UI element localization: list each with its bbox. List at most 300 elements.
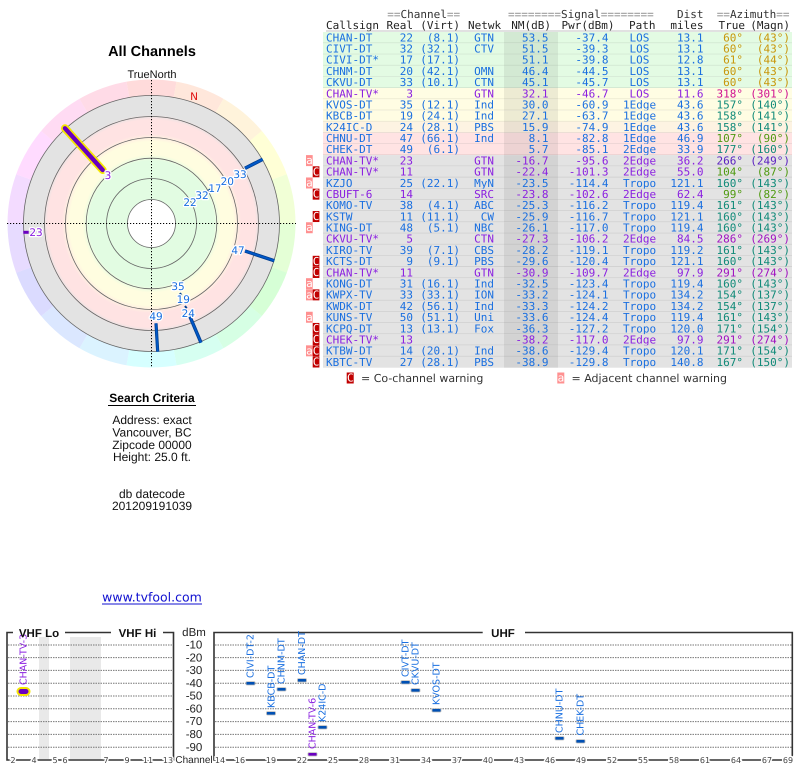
true north label: TrueNorth bbox=[127, 69, 177, 81]
UHF channel axis: 52 bbox=[607, 756, 617, 765]
row: KIRO-TV: CBS bbox=[474, 244, 494, 257]
row: KVOS-DT: 157° bbox=[716, 98, 743, 111]
row: KING-DT: -117.0 bbox=[569, 222, 608, 235]
row: CHEK-TV*: -117.0 bbox=[569, 333, 608, 346]
dBm scale: Channel bbox=[175, 755, 213, 766]
row: CHAN-DT: GTN bbox=[474, 31, 494, 44]
row: KBCB-DT: 19 bbox=[400, 110, 413, 123]
row: CHEK-DT: (6.1) bbox=[427, 143, 460, 156]
row: KING-DT: (5.1) bbox=[427, 222, 460, 235]
row: KWPX-TV: 134.2 bbox=[670, 289, 704, 302]
stations bearing 157 degrees: 19 bbox=[177, 294, 190, 306]
row: KING-DT: (143°) bbox=[750, 222, 790, 235]
station: CHNM-DT: CHNM-DT bbox=[276, 638, 288, 684]
row: K24IC-D: 158° bbox=[716, 121, 743, 134]
row: K24IC-D: -74.9 bbox=[575, 121, 608, 134]
row: KOMO-TV: (4.1) bbox=[427, 199, 460, 212]
row: KTBW-DT: (154°) bbox=[750, 345, 790, 358]
row: CHAN-TV* 11: -101.3 bbox=[569, 166, 608, 179]
row: KOMO-TV: Tropo bbox=[623, 199, 656, 212]
row: CHEK-DT: CHEK-DT bbox=[326, 143, 373, 156]
row: KBCB-DT: -63.7 bbox=[575, 110, 608, 123]
row: KBTC-TV: KBTC-TV bbox=[326, 356, 373, 369]
row: CHAN-DT: 60° bbox=[723, 31, 743, 44]
row: KSTW: C bbox=[313, 210, 319, 223]
dBm scale: -20 bbox=[186, 652, 202, 664]
row: CKVU-TV*: -106.2 bbox=[569, 233, 608, 246]
row: KING-DT: 119.4 bbox=[670, 222, 704, 235]
row: KWPX-TV bbox=[306, 288, 792, 302]
row: KWPX-TV: (137°) bbox=[750, 289, 790, 302]
row: KBCB-DT: (24.1) bbox=[420, 110, 460, 123]
table header: True bbox=[718, 19, 745, 32]
row: KWDK-DT: -33.3 bbox=[515, 300, 548, 313]
dBm scale: -90 bbox=[186, 742, 202, 754]
title: All Channels bbox=[108, 44, 196, 60]
row: KSTW: (11.1) bbox=[420, 210, 460, 223]
UHF channel axis bbox=[215, 756, 793, 765]
row: KING-DT: -26.1 bbox=[515, 222, 548, 235]
row: KWDK-DT: (56.1) bbox=[420, 300, 460, 313]
row: CKVU-TV* bbox=[323, 233, 792, 246]
stations bearing 60 degrees bbox=[183, 159, 263, 209]
row: KVOS-DT: 30.0 bbox=[522, 98, 548, 111]
row: CKVU-DT: 13.1 bbox=[677, 76, 704, 89]
row: KCPQ-DT: (13.1) bbox=[420, 322, 460, 335]
row: KBCB-DT: KBCB-DT bbox=[326, 110, 373, 123]
row: CHAN-DT: 13.1 bbox=[677, 31, 704, 44]
station 3 bearing: 3 bbox=[105, 170, 111, 182]
row: KONG-DT: (16.1) bbox=[420, 277, 460, 290]
row: CKVU-DT: CKVU-DT bbox=[326, 76, 373, 89]
row: KCTS-DT: (143°) bbox=[750, 255, 790, 268]
row: KWDK-DT: KWDK-DT bbox=[326, 300, 373, 313]
row: CIVT-DT: LOS bbox=[630, 42, 649, 55]
row: CHNM-DT: CHNM-DT bbox=[326, 65, 373, 78]
row: CHNU-DT: 47 bbox=[400, 132, 413, 145]
database date code: db datecode bbox=[119, 487, 185, 501]
row: KCPQ-DT: -127.2 bbox=[569, 322, 608, 335]
row: KUNS-TV: (51.1) bbox=[420, 311, 460, 324]
row: CKVU-TV*: 5 bbox=[406, 233, 413, 246]
row: KOMO-TV bbox=[323, 199, 792, 212]
station: KBCB-DT: KBCB-DT bbox=[266, 666, 278, 708]
station 23 bearing bbox=[23, 227, 43, 239]
row: CIVT-DT: 60° bbox=[723, 42, 743, 55]
row: KONG-DT: (143°) bbox=[750, 277, 790, 290]
row: CKVU-DT: 45.1 bbox=[522, 76, 548, 89]
station 47 bearing bbox=[231, 245, 274, 261]
VHF channel axis: 9 bbox=[124, 756, 130, 765]
row: CHAN-TV* 11: GTN bbox=[474, 166, 494, 179]
search details: Address: exact bbox=[112, 413, 192, 427]
row: K24IC-D: PBS bbox=[474, 121, 494, 134]
row: KCTS-DT: KCTS-DT bbox=[326, 255, 373, 268]
row: CBUFT-6 bbox=[313, 188, 792, 201]
website link: www.tvfool.com bbox=[102, 590, 202, 604]
UHF channel axis: 67 bbox=[762, 756, 772, 765]
UHF channel axis: 40 bbox=[483, 756, 493, 765]
row: KOMO-TV: ABC bbox=[474, 199, 494, 212]
row: CHAN-DT: LOS bbox=[630, 31, 649, 44]
row: CBUFT-6: 99° bbox=[723, 188, 743, 201]
UHF channel axis: 43 bbox=[514, 756, 524, 765]
UHF channel axis: 19 bbox=[266, 756, 276, 765]
row: KCTS-DT: Tropo bbox=[623, 255, 656, 268]
row: KVOS-DT: KVOS-DT bbox=[326, 98, 373, 111]
row: KWPX-TV: C bbox=[313, 288, 319, 301]
row: KCPQ-DT: KCPQ-DT bbox=[326, 322, 373, 335]
row: KCPQ-DT bbox=[313, 322, 792, 335]
row: CKVU-TV*: (269°) bbox=[750, 233, 790, 246]
row: CHNM-DT: OMN bbox=[474, 65, 494, 78]
row: KBCB-DT: Ind bbox=[474, 110, 494, 123]
dBm scale: -80 bbox=[186, 729, 202, 741]
magnetic north marker: N bbox=[190, 91, 198, 103]
row: CHAN-TV* 23: -95.6 bbox=[575, 154, 608, 167]
table header: ========Signal======== bbox=[508, 8, 654, 21]
table header: (Virt) bbox=[420, 19, 460, 32]
UHF channel axis: 28 bbox=[359, 756, 369, 765]
polar chart bbox=[7, 80, 296, 368]
dBm scale: -40 bbox=[186, 678, 202, 690]
row: CBUFT-6: -23.8 bbox=[515, 188, 548, 201]
row: CKVU-DT: (43°) bbox=[757, 76, 790, 89]
row: CHEK-TV*: 97.9 bbox=[677, 333, 704, 346]
row: CHAN-TV* 11 second: 97.9 bbox=[677, 266, 704, 279]
search criteria heading: Search Criteria bbox=[109, 391, 195, 405]
row: KVOS-DT: 35 bbox=[400, 98, 413, 111]
row: KONG-DT: 160° bbox=[716, 277, 743, 290]
row: CHNM-DT bbox=[323, 65, 792, 78]
row: CHNU-DT: 8.1 bbox=[529, 132, 548, 145]
label: CHAN-TV-3: CHAN-TV-3 bbox=[18, 634, 30, 685]
row: CIVT-DT: CIVT-DT bbox=[326, 42, 373, 55]
row: CHAN-TV* 11 second bbox=[313, 266, 792, 279]
row: CHNU-DT: -82.8 bbox=[575, 132, 608, 145]
table header: (Magn) bbox=[750, 19, 790, 32]
stations bearing 60 degrees: 32 bbox=[195, 190, 209, 202]
row: CHNU-DT: CHNU-DT bbox=[326, 132, 373, 145]
row: KONG-DT: a bbox=[306, 277, 313, 290]
row: CHEK-TV*: (274°) bbox=[750, 333, 790, 346]
row: KCTS-DT: (9.1) bbox=[427, 255, 460, 268]
row: KBTC-TV: C bbox=[313, 356, 319, 369]
row: CIVT-DT: CTV bbox=[474, 42, 494, 55]
row: KSTW: (143°) bbox=[750, 210, 790, 223]
VHF channel axis: 5 bbox=[52, 756, 58, 765]
row: CHNM-DT: LOS bbox=[630, 65, 649, 78]
row: KVOS-DT: -60.9 bbox=[575, 98, 608, 111]
row: CHAN-TV* 11: C bbox=[313, 165, 319, 178]
row: K24IC-D: 24 bbox=[400, 121, 413, 134]
row: CHAN-TV* 11 second: (274°) bbox=[750, 266, 790, 279]
legend: adjacent channel warning: a bbox=[558, 372, 564, 384]
row: KWDK-DT: 154° bbox=[716, 300, 743, 313]
row: KOMO-TV: -25.3 bbox=[515, 199, 548, 212]
table header: Path bbox=[629, 19, 656, 32]
row: KTBW-DT: 14 bbox=[400, 345, 413, 358]
row: CBUFT-6: SRC bbox=[474, 188, 494, 201]
row: CHAN-TV* 11: 2Edge bbox=[623, 166, 656, 179]
stations bearing 157 degrees: 35 bbox=[171, 281, 185, 293]
row: KWPX-TV: KWPX-TV bbox=[326, 289, 373, 302]
row: KONG-DT: KONG-DT bbox=[326, 277, 373, 290]
row: KWPX-TV: -33.2 bbox=[515, 289, 548, 302]
row: KWDK-DT: Tropo bbox=[623, 300, 656, 313]
row: CHNM-DT: 20 bbox=[400, 65, 413, 78]
row: KUNS-TV: 161° bbox=[716, 311, 743, 324]
row: CHAN-TV* 11 second: 11 bbox=[400, 266, 413, 279]
row: KTBW-DT: 171° bbox=[716, 345, 743, 358]
row: CKVU-DT bbox=[323, 76, 792, 89]
row: CBUFT-6: 2Edge bbox=[623, 188, 656, 201]
row: KIRO-TV: -28.2 bbox=[515, 244, 548, 257]
row: KOMO-TV: 38 bbox=[400, 199, 413, 212]
row: KING-DT: 48 bbox=[400, 222, 413, 235]
row: CHAN-TV* 3: GTN bbox=[474, 87, 494, 100]
station 47 bearing: 47 bbox=[231, 245, 245, 257]
row: CKVU-TV*: 84.5 bbox=[677, 233, 704, 246]
row: CHAN-TV* 3: 3 bbox=[406, 87, 413, 100]
search details: Vancouver, BC bbox=[112, 426, 192, 440]
row: KIRO-TV: 39 bbox=[400, 244, 413, 257]
dBm scale: dBm bbox=[182, 627, 206, 639]
row: CIVT-DT bbox=[323, 42, 792, 55]
row: CIVT-DT: (43°) bbox=[757, 42, 790, 55]
row: CHEK-DT: -85.1 bbox=[575, 143, 608, 156]
row: CKVU-DT: 33 bbox=[400, 76, 413, 89]
row: KOMO-TV: KOMO-TV bbox=[326, 199, 373, 212]
row: KCTS-DT: PBS bbox=[474, 255, 494, 268]
row: CHAN-TV* 11 second: GTN bbox=[474, 266, 494, 279]
row: KIRO-TV: Tropo bbox=[623, 244, 656, 257]
row: KSTW: Tropo bbox=[623, 210, 656, 223]
row: CKVU-DT: -45.7 bbox=[575, 76, 608, 89]
row: CHNU-DT: 107° bbox=[716, 132, 743, 145]
row: KZJO: 121.1 bbox=[670, 177, 704, 190]
row: CHAN-TV* 3: CHAN-TV* bbox=[326, 87, 379, 100]
row: CHAN-TV* 23: 23 bbox=[400, 154, 413, 167]
station 3 bearing bbox=[65, 128, 111, 182]
row: KWDK-DT: 42 bbox=[400, 300, 413, 313]
row: CHAN-TV* 23: CHAN-TV* bbox=[326, 154, 379, 167]
row: CHNM-DT: (42.1) bbox=[420, 65, 460, 78]
row: CHAN-TV* 11: 11 bbox=[400, 166, 413, 179]
row: KZJO bbox=[306, 176, 792, 190]
VHF channel axis: 6 bbox=[62, 756, 68, 765]
row: KONG-DT: -32.5 bbox=[515, 277, 548, 290]
row: KUNS-TV: -124.4 bbox=[569, 311, 609, 324]
row: KING-DT: KING-DT bbox=[326, 222, 373, 235]
row: KBTC-TV: -38.9 bbox=[515, 356, 548, 369]
UHF spectrum chart bbox=[214, 628, 793, 765]
row: CKVU-DT: 60° bbox=[723, 76, 743, 89]
row: CHAN-TV* 3: 32.1 bbox=[522, 87, 548, 100]
row: KWPX-TV: ION bbox=[474, 289, 494, 302]
row: KWPX-TV: 154° bbox=[716, 289, 743, 302]
row: KING-DT: a bbox=[306, 221, 313, 234]
row: KUNS-TV: -33.6 bbox=[515, 311, 548, 324]
row: CHAN-TV* 23 bbox=[306, 154, 792, 167]
row: CHAN-TV* 3 bbox=[323, 87, 792, 100]
row: CKVU-DT: LOS bbox=[630, 76, 649, 89]
row: CHNU-DT: 1Edge bbox=[623, 132, 656, 145]
row: KZJO: (22.1) bbox=[420, 177, 460, 190]
row: CHAN-TV* 11 second: 2Edge bbox=[623, 266, 656, 279]
row: CIVI-DT*: 17 bbox=[400, 54, 413, 67]
row: KZJO: -23.5 bbox=[515, 177, 548, 190]
row: KIRO-TV: (143°) bbox=[750, 244, 790, 257]
row: CHAN-TV* 23: -16.7 bbox=[515, 154, 548, 167]
station: K24IC-D: K24IC-D bbox=[318, 684, 328, 722]
row: CHEK-TV*: 2Edge bbox=[623, 333, 656, 346]
row: KWPX-TV: (33.1) bbox=[420, 289, 460, 302]
row: KZJO: Tropo bbox=[623, 177, 656, 190]
row: CHNM-DT: 13.1 bbox=[677, 65, 704, 78]
row: KBTC-TV: (28.1) bbox=[420, 356, 460, 369]
row: CBUFT-6: CBUFT-6 bbox=[326, 188, 372, 201]
UHF channel axis: 46 bbox=[545, 756, 555, 765]
row: KBTC-TV: PBS bbox=[474, 356, 494, 369]
stations bearing 60 degrees: 33 bbox=[233, 169, 247, 181]
row: CHEK-DT: 2Edge bbox=[623, 143, 656, 156]
row: CKVU-DT: CTN bbox=[474, 76, 494, 89]
row: KZJO: 160° bbox=[716, 177, 743, 190]
row: CHAN-DT: (43°) bbox=[757, 31, 790, 44]
table header: NM(dB) bbox=[511, 19, 551, 32]
row: KBTC-TV: -129.8 bbox=[569, 356, 608, 369]
row: CHAN-TV* 23: a bbox=[306, 154, 313, 167]
row: CKVU-TV*: 2Edge bbox=[623, 233, 656, 246]
UHF channel axis: 58 bbox=[669, 756, 679, 765]
row: KCTS-DT: C bbox=[313, 255, 319, 268]
signal strength bands bbox=[24, 96, 280, 352]
row: KING-DT: Tropo bbox=[623, 222, 656, 235]
database date code: 201209191039 bbox=[112, 499, 192, 513]
row: KBCB-DT: 43.6 bbox=[677, 110, 704, 123]
row: CHAN-TV* 11: -22.4 bbox=[515, 166, 549, 179]
row: CHNM-DT: (43°) bbox=[757, 65, 790, 78]
table header: ==Azimuth== bbox=[717, 8, 790, 21]
station: CHAN-TV-6: CHAN-TV-6 bbox=[308, 698, 318, 749]
stations bearing 157 degrees bbox=[171, 281, 201, 343]
row: KVOS-DT: Ind bbox=[474, 98, 494, 111]
search details: Height: 25.0 ft. bbox=[113, 450, 191, 464]
VHF Lo heading: VHF Lo bbox=[19, 628, 59, 640]
row: KIRO-TV: 119.2 bbox=[670, 244, 704, 257]
row: CHAN-TV* 23: (249°) bbox=[750, 154, 790, 167]
row: KVOS-DT: 1Edge bbox=[623, 98, 656, 111]
row: CHAN-DT: 53.5 bbox=[522, 31, 548, 44]
row: CHEK-DT: 5.7 bbox=[529, 143, 548, 156]
row: KIRO-TV: KIRO-TV bbox=[326, 244, 373, 257]
row: KING-DT: NBC bbox=[474, 222, 494, 235]
VHF channel axis: 2 bbox=[10, 756, 16, 765]
row: KVOS-DT bbox=[323, 98, 792, 111]
row: CIVT-DT: 13.1 bbox=[677, 42, 704, 55]
UHF channel axis: 14 bbox=[215, 756, 225, 765]
station table bbox=[306, 31, 792, 369]
search details: Zipcode 00000 bbox=[112, 438, 192, 452]
row: CIVI-DT*: 61° bbox=[723, 54, 743, 67]
VHF channel axis: 13 bbox=[163, 756, 173, 765]
table header: miles bbox=[670, 19, 704, 32]
row: KTBW-DT: C bbox=[313, 344, 319, 357]
row: CIVT-DT: 32 bbox=[400, 42, 413, 55]
row: KCPQ-DT: Fox bbox=[474, 322, 494, 335]
row: KCPQ-DT: 171° bbox=[716, 322, 743, 335]
row: CIVI-DT*: 51.1 bbox=[522, 54, 548, 67]
row: KTBW-DT: -38.6 bbox=[515, 345, 548, 358]
station: CHNU-DT: CHNU-DT bbox=[554, 688, 566, 733]
station 49 bearing bbox=[149, 311, 163, 352]
row: CKVU-TV*: CTN bbox=[474, 233, 494, 246]
row: KTBW-DT: -129.4 bbox=[569, 345, 609, 358]
VHF channel axis: 4 bbox=[31, 756, 37, 765]
row: KONG-DT bbox=[306, 277, 792, 290]
row: CHNM-DT: -44.5 bbox=[575, 65, 608, 78]
row: KVOS-DT: (140°) bbox=[750, 98, 790, 111]
station: KVOS-DT: KVOS-DT bbox=[432, 662, 442, 705]
row: KWPX-TV: a bbox=[306, 288, 313, 301]
row: CHEK-TV*: 13 bbox=[400, 333, 413, 346]
row: CHEK-TV*: C bbox=[313, 333, 319, 346]
row: KBTC-TV: (150°) bbox=[750, 356, 790, 369]
row: KBTC-TV bbox=[313, 356, 792, 369]
row: KCPQ-DT: -36.3 bbox=[515, 322, 548, 335]
row: CIVI-DT*: CIVI-DT* bbox=[326, 54, 379, 67]
search details bbox=[112, 413, 192, 464]
row: KCTS-DT: -29.6 bbox=[515, 255, 548, 268]
row: CHNU-DT: Ind bbox=[474, 132, 494, 145]
row: KTBW-DT: KTBW-DT bbox=[326, 345, 373, 358]
dBm scale: -70 bbox=[186, 716, 202, 728]
row: CHNM-DT: 46.4 bbox=[522, 65, 549, 78]
compass colour ring bbox=[8, 80, 296, 368]
UHF channel axis: 61 bbox=[700, 756, 710, 765]
row: KUNS-TV: KUNS-TV bbox=[326, 311, 373, 324]
row: KSTW: 121.1 bbox=[670, 210, 704, 223]
UHF channel axis: 37 bbox=[452, 756, 462, 765]
table header: Callsign bbox=[326, 19, 379, 32]
row: CHAN-TV* 11 second: CHAN-TV* bbox=[326, 266, 379, 279]
row: KOMO-TV: 119.4 bbox=[670, 199, 704, 212]
station 23 bearing: 23 bbox=[29, 227, 43, 239]
row: CIVI-DT*: LOS bbox=[630, 54, 649, 67]
row: KUNS-TV: a bbox=[306, 311, 313, 324]
row: CBUFT-6: 14 bbox=[400, 188, 413, 201]
row: CHEK-DT: (160°) bbox=[750, 143, 790, 156]
row: KBCB-DT: 1Edge bbox=[623, 110, 656, 123]
row: KZJO: KZJO bbox=[326, 177, 352, 190]
row: CIVI-DT*: 12.8 bbox=[677, 54, 704, 67]
row: KUNS-TV: Uni bbox=[474, 311, 494, 324]
row: KUNS-TV bbox=[306, 311, 792, 324]
UHF channel axis: 69 bbox=[783, 756, 793, 765]
row: KWDK-DT: 134.2 bbox=[670, 300, 704, 313]
row: KIRO-TV bbox=[323, 244, 792, 257]
row: KZJO: MyN bbox=[474, 177, 494, 190]
row: KSTW: -116.7 bbox=[569, 210, 608, 223]
row: CIVT-DT: (32.1) bbox=[420, 42, 460, 55]
row: CHAN-TV* 11 second: -30.9 bbox=[515, 266, 548, 279]
VHF channel axis bbox=[10, 756, 173, 765]
row: KZJO: a bbox=[306, 176, 313, 189]
row: CKVU-DT: (10.1) bbox=[420, 76, 460, 89]
row: CIVI-DT*: (44°) bbox=[757, 54, 790, 67]
row: CHNU-DT: 46.9 bbox=[677, 132, 704, 145]
